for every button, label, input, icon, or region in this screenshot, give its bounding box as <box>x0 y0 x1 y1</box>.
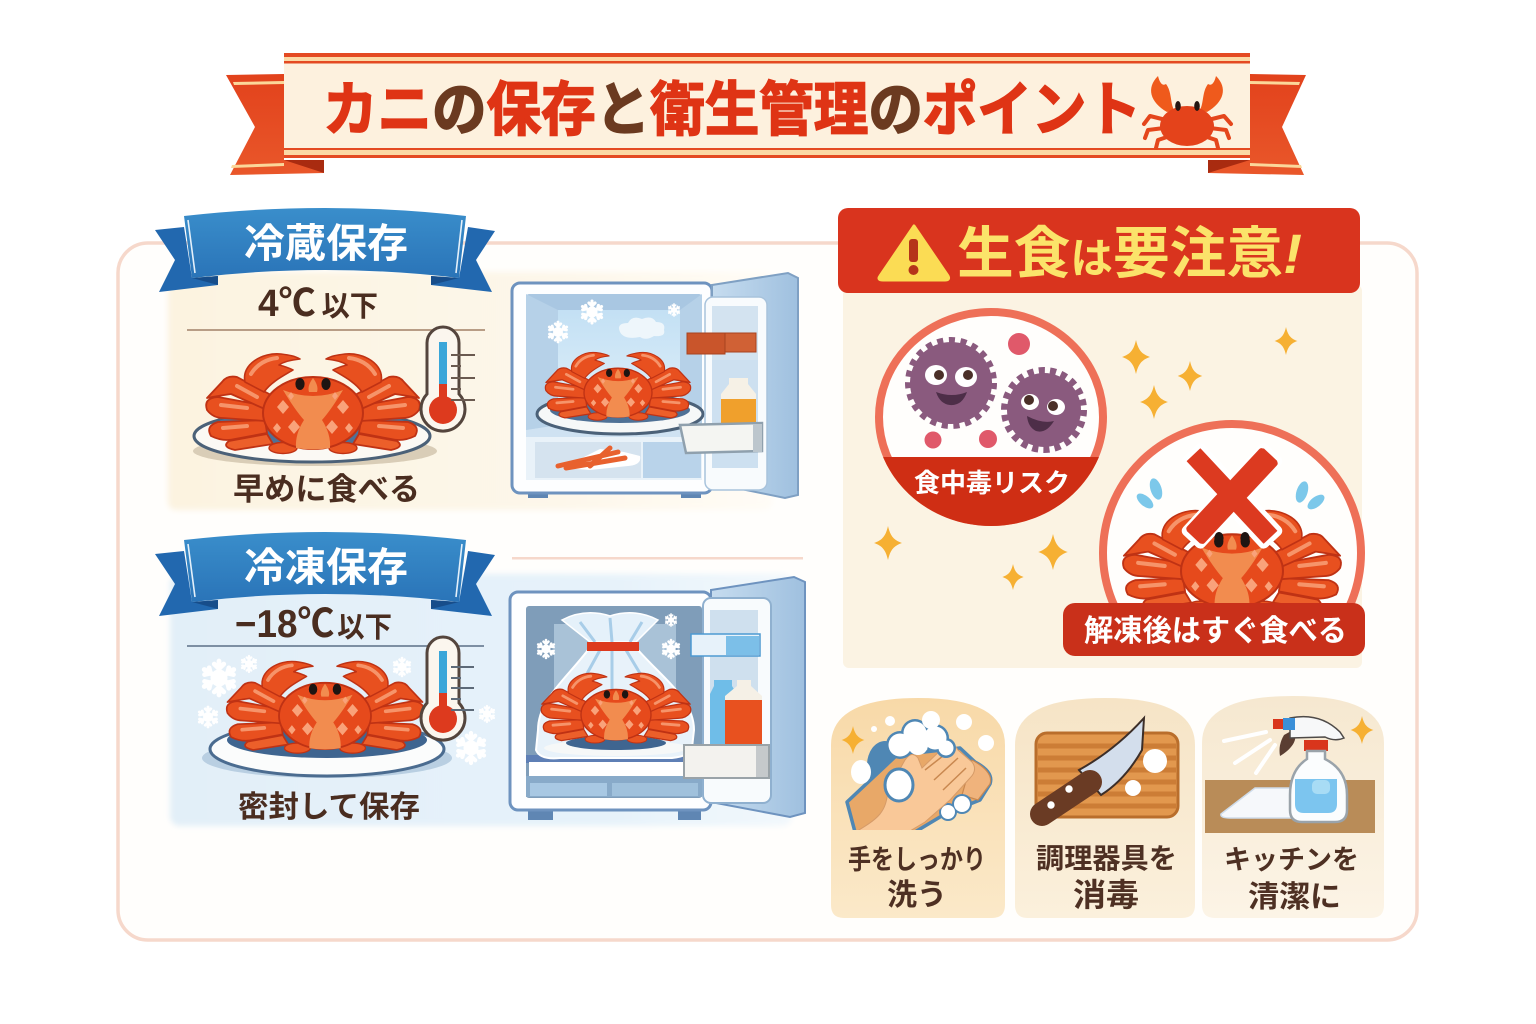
title band <box>284 53 1250 158</box>
risk label: 食中毒リスク <box>914 468 1070 498</box>
right ribbon tail <box>1208 74 1306 175</box>
icon: germ right <box>1006 372 1082 448</box>
card caption: 手をしっかり <box>848 845 986 875</box>
icon: spray bottle <box>1224 717 1347 822</box>
circle: no raw crab <box>1063 424 1365 682</box>
fridge: chilled <box>512 273 798 498</box>
panel background <box>843 285 1362 668</box>
infographic canvas <box>116 53 1419 942</box>
panel background <box>170 574 792 826</box>
icon: germ left <box>909 341 993 425</box>
warning heading text: 生食は要注意! <box>957 222 1302 285</box>
card: sanitize utensils <box>1015 698 1195 918</box>
eat soon label <box>1063 603 1365 656</box>
panel: frozen storage <box>155 532 805 826</box>
counter <box>1205 780 1375 833</box>
heading ribbon: chilled: 冷蔵保存 <box>244 222 408 266</box>
title text: カニの保存と衛生管理のポイント <box>323 78 1141 143</box>
heading ribbon: frozen: 冷凍保存 <box>244 546 408 590</box>
card: clean kitchen: 清潔に <box>1248 881 1341 914</box>
caption: 密封して保存 <box>238 791 420 824</box>
caption: 早めに食べる <box>233 472 420 507</box>
panel: hygiene cards <box>831 696 1384 918</box>
card caption: キッチンを <box>1224 845 1359 875</box>
card: sanitize utensils: 消毒 <box>1073 877 1139 913</box>
circle: food poisoning risk <box>870 312 1110 537</box>
panel: raw food warning <box>838 208 1365 682</box>
outer rounded frame <box>118 243 1417 940</box>
icon: red cross <box>1183 445 1281 547</box>
card caption: 調理器具を <box>1036 843 1177 874</box>
divider line <box>187 645 484 647</box>
divider line: between storage sections <box>512 557 803 560</box>
left ribbon tail <box>226 74 324 175</box>
title ribbon <box>226 53 1306 175</box>
icon: warning triangle <box>879 226 949 280</box>
card: wash hands <box>831 698 1005 918</box>
temperature label: −18℃以下 <box>235 603 392 646</box>
card: wash hands: 洗う <box>887 879 947 912</box>
warning header <box>838 208 1360 293</box>
icon: title crab <box>1144 76 1231 148</box>
sparkles <box>874 327 1297 590</box>
plate with crab <box>193 354 437 466</box>
icon: cutting board and knife <box>1036 718 1178 817</box>
thermometer <box>421 637 474 740</box>
heading ribbon: frozen <box>155 532 495 616</box>
thermometer <box>421 327 475 431</box>
fridge: frozen <box>510 577 805 820</box>
temperature label: 4℃以下 <box>258 283 378 325</box>
icon: hands with foam <box>847 711 994 834</box>
icon: water drops <box>1134 477 1327 512</box>
panel background <box>168 272 772 510</box>
panel: refrigerated storage <box>155 208 798 510</box>
icon: sponge <box>1221 788 1292 818</box>
circle: no raw crab: 解凍後はすぐ食べる <box>1084 615 1347 648</box>
card: clean kitchen <box>1202 696 1384 918</box>
plate with crab <box>202 661 452 778</box>
snowflakes <box>199 656 494 763</box>
divider line <box>187 329 485 331</box>
heading ribbon: chilled <box>155 208 495 292</box>
